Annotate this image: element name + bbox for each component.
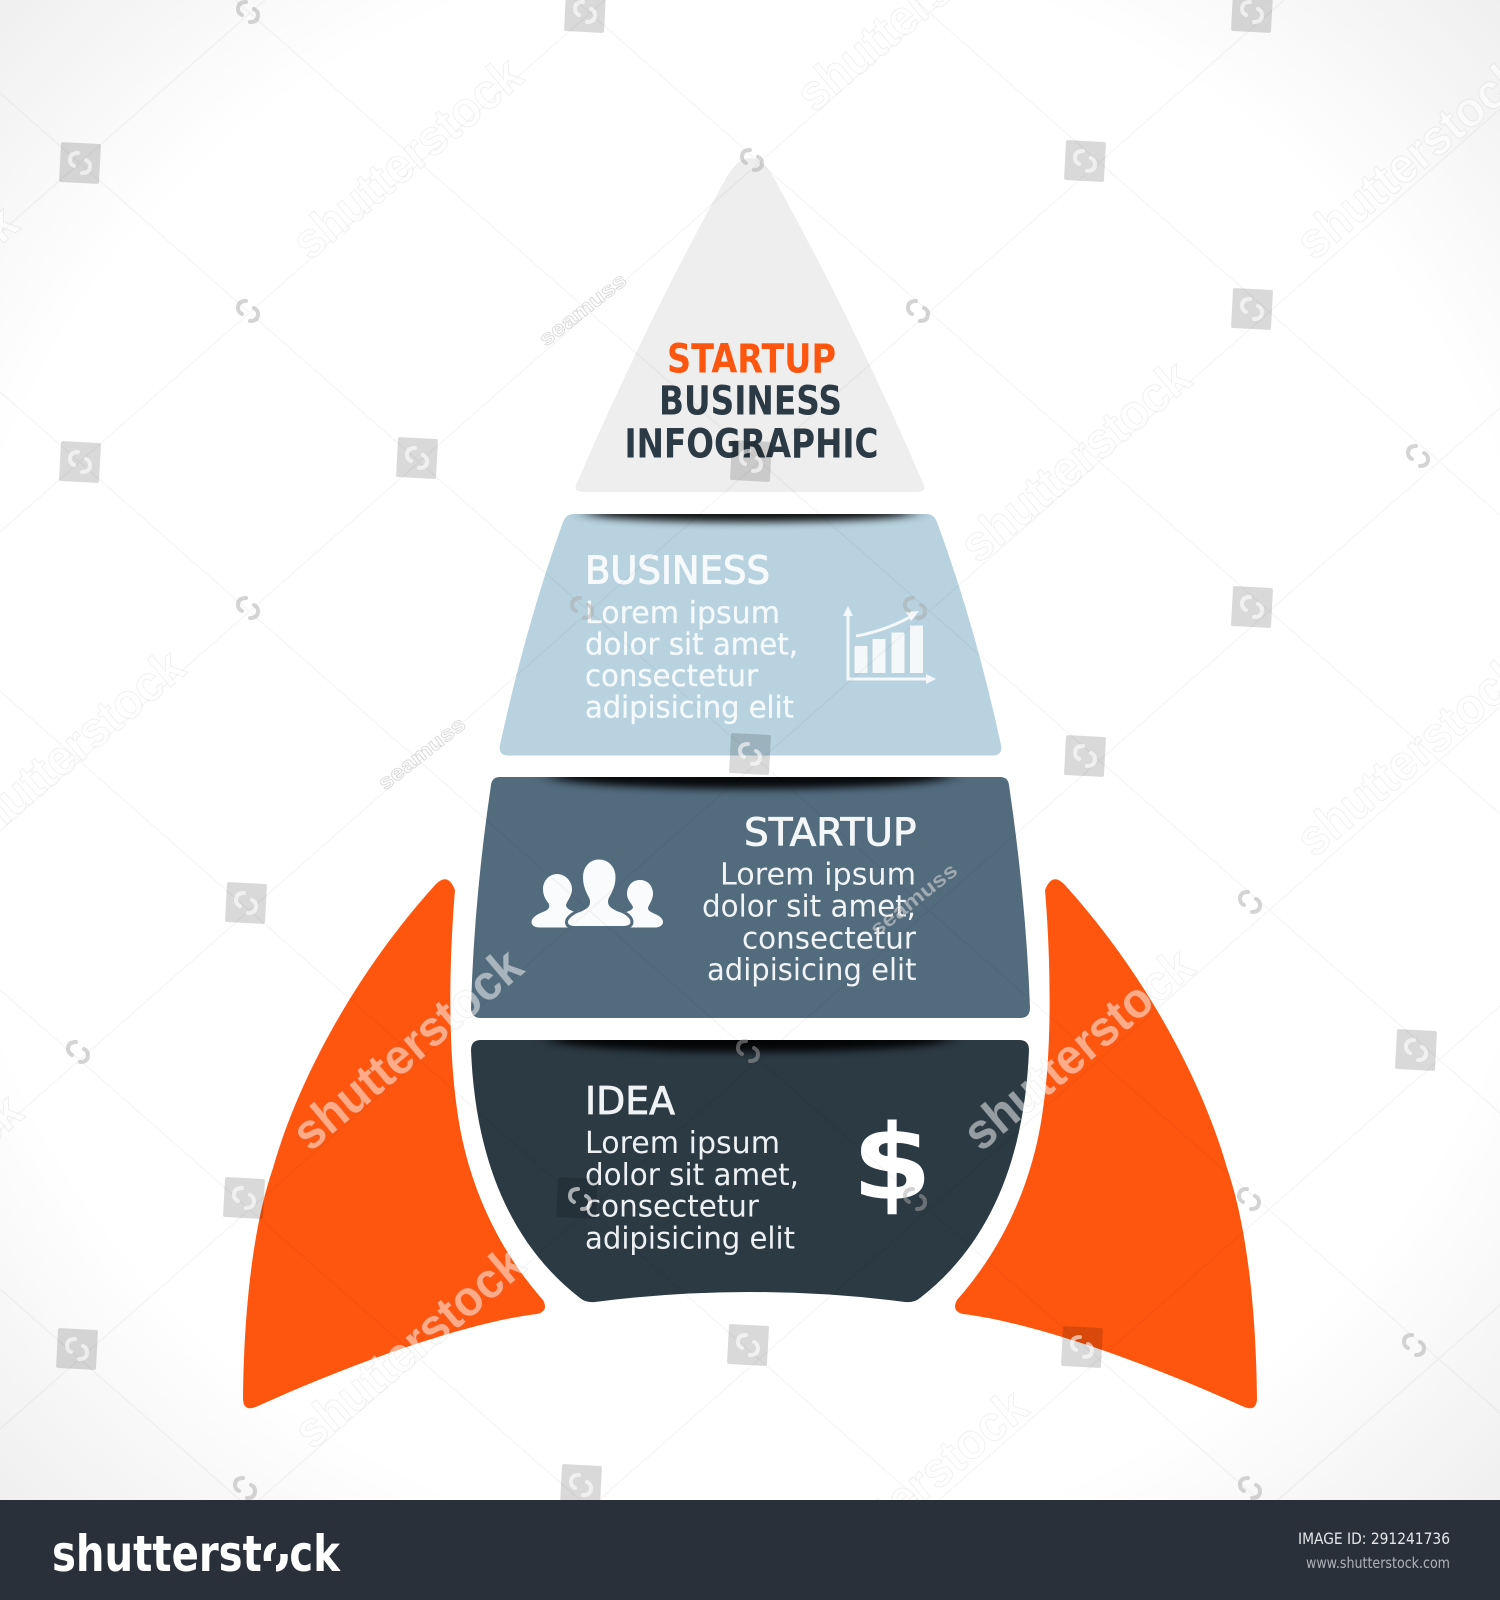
startup body text: consectetur (742, 922, 917, 956)
rocket nose cone: title panel (576, 158, 924, 492)
shutterstock watermark text: shutterstock (281, 937, 533, 1161)
title text: STARTUP (667, 336, 836, 382)
idea body text: consectetur (585, 1190, 760, 1224)
startup body text: Lorem ipsum (720, 858, 916, 892)
panel: startup (471, 763, 1030, 1018)
shutterstock watermark text: shutterstock (283, 1235, 535, 1459)
icon: growth bar chart (843, 606, 936, 684)
footer url: www.shutterstock.com (1306, 1554, 1450, 1572)
title text: INFOGRAPHIC (624, 422, 878, 468)
shutterstock watermark text: shutterstock (786, 1378, 1038, 1600)
idea heading: IDEA (585, 1079, 675, 1123)
shutterstock watermark text: shutterstock (949, 349, 1201, 573)
seamuss watermark text: seamuss (374, 713, 470, 795)
icon: group of people (532, 858, 663, 928)
idea body text: Lorem ipsum (585, 1126, 780, 1161)
business body text (585, 596, 798, 726)
business body text: adipisicing elit (585, 690, 794, 726)
business body text: dolor sit amet, (585, 628, 798, 662)
footer bar (0, 1500, 1500, 1600)
seamuss watermark text: seamuss (866, 859, 962, 941)
panel: idea (471, 1026, 1029, 1302)
idea body text: adipisicing elit (585, 1222, 795, 1256)
icon: dollar sign: $ (852, 1102, 932, 1224)
business body text: Lorem ipsum (585, 596, 780, 631)
startup body text (702, 858, 917, 988)
footer image id: IMAGE ID: 291241736 (1298, 1529, 1450, 1548)
startup body text: adipisicing elit (707, 953, 917, 988)
seamuss watermark text: seamuss (535, 269, 631, 351)
business heading: BUSINESS (585, 548, 770, 592)
footer logo: shutterstock (52, 1525, 341, 1583)
shutterstock watermark text: shutterstock (952, 937, 1204, 1161)
title text: BUSINESS (659, 378, 842, 424)
left rocket fin (243, 879, 545, 1408)
seamuss watermark text (374, 269, 962, 941)
idea body text (585, 1126, 799, 1256)
shutterstock watermark text: shutterstock (281, 46, 533, 270)
right rocket fin (955, 879, 1257, 1408)
startup heading: STARTUP (744, 810, 916, 854)
title text (624, 336, 878, 468)
panel: business (500, 504, 1001, 756)
business body text: consectetur (585, 659, 759, 694)
idea body text: dolor sit amet, (585, 1158, 799, 1193)
startup body text: dolor sit amet, (702, 890, 916, 924)
